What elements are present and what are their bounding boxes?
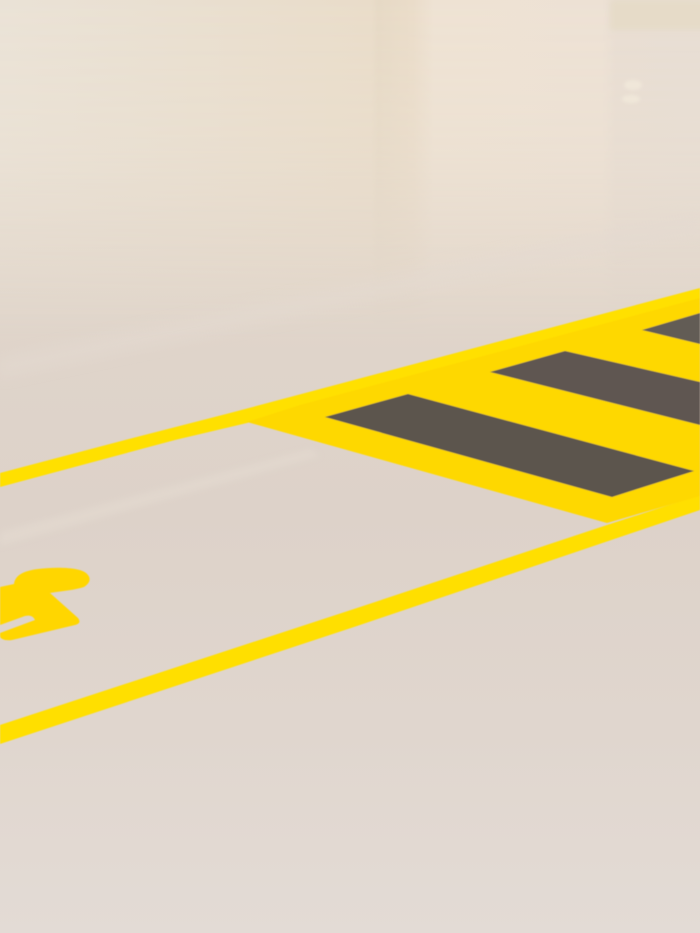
bottom lane line: [0, 495, 700, 744]
dark hatch stripe 3: [642, 313, 700, 344]
upper lane line: [0, 288, 700, 487]
dark hatch stripe 2: [490, 351, 700, 425]
floor background: [0, 0, 699, 216]
dark hatch stripe 1: [325, 394, 694, 497]
yellow hatched block: [247, 298, 700, 523]
floor symbol: [0, 568, 90, 640]
lane markings: [0, 288, 700, 744]
scene: glossy floor with yellow lane markings: [0, 0, 700, 745]
wall reflection: [177, 0, 428, 158]
floor reflection bands: [0, 212, 700, 378]
